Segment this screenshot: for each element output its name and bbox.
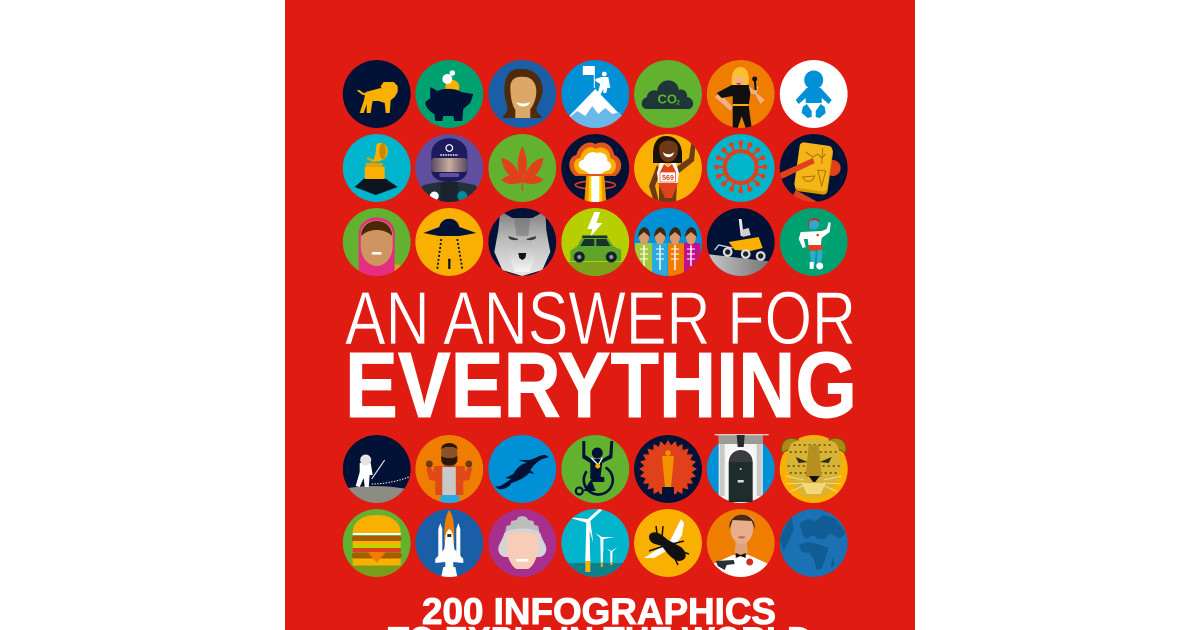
icon: CO2 cloud: [634, 60, 702, 128]
icon: astronaut golfing on the moon: [343, 435, 411, 503]
icon: nuclear mushroom cloud: [561, 134, 629, 202]
icon: man with raised hands: [415, 435, 483, 503]
icon: secret agent in white tuxedo: [707, 509, 775, 577]
icon: singer with microphone: [707, 60, 775, 128]
icon: queen with tiara: [488, 509, 556, 577]
icon: woman in headscarf: [343, 208, 411, 276]
icon: lion: [343, 60, 411, 128]
icon: wolf: [488, 208, 556, 276]
icon: piggy bank: [415, 60, 483, 128]
icon: footballer: [780, 208, 848, 276]
title line 2: EVERYTHING: [345, 333, 857, 437]
icon: oscar statuette on starburst: [634, 435, 702, 503]
icon: leopard: [780, 435, 848, 503]
icon: UFO abduction: [415, 208, 483, 276]
icon: mars rover: [707, 208, 775, 276]
icon: bee: [634, 509, 702, 577]
icon: CO2 cloud: CO: [658, 92, 677, 106]
icon: cannabis leaf: [488, 134, 556, 202]
panel: book cover: [285, 0, 915, 630]
icon: burger: [343, 509, 411, 577]
icon: globe: [780, 509, 848, 577]
icon: runner number 569: 569: [662, 175, 674, 182]
icon: electric car: [561, 208, 629, 276]
icon: virus: [707, 134, 775, 202]
icon: wheelchair athlete with medal: [561, 435, 629, 503]
icon: CO2 cloud: 2: [676, 100, 680, 106]
icon: gold tablet: [780, 134, 848, 202]
icon: mountain summit flag: [561, 60, 629, 128]
icon: racing driver: [415, 134, 483, 202]
icon: baby: [780, 60, 848, 128]
icon: wind turbines: [561, 507, 629, 577]
icon: grammy gramophone: [343, 134, 411, 202]
icon: space shuttle: [415, 509, 483, 577]
title line 1: AN ANSWER FOR: [345, 276, 856, 360]
icon: smiling woman: [488, 60, 556, 128]
icon: runner number 569: [634, 134, 702, 202]
icon: loch ness monster: [488, 435, 556, 503]
icon: number 10 door: [707, 434, 775, 503]
icon: four band members in colourful uniforms: [634, 208, 702, 276]
